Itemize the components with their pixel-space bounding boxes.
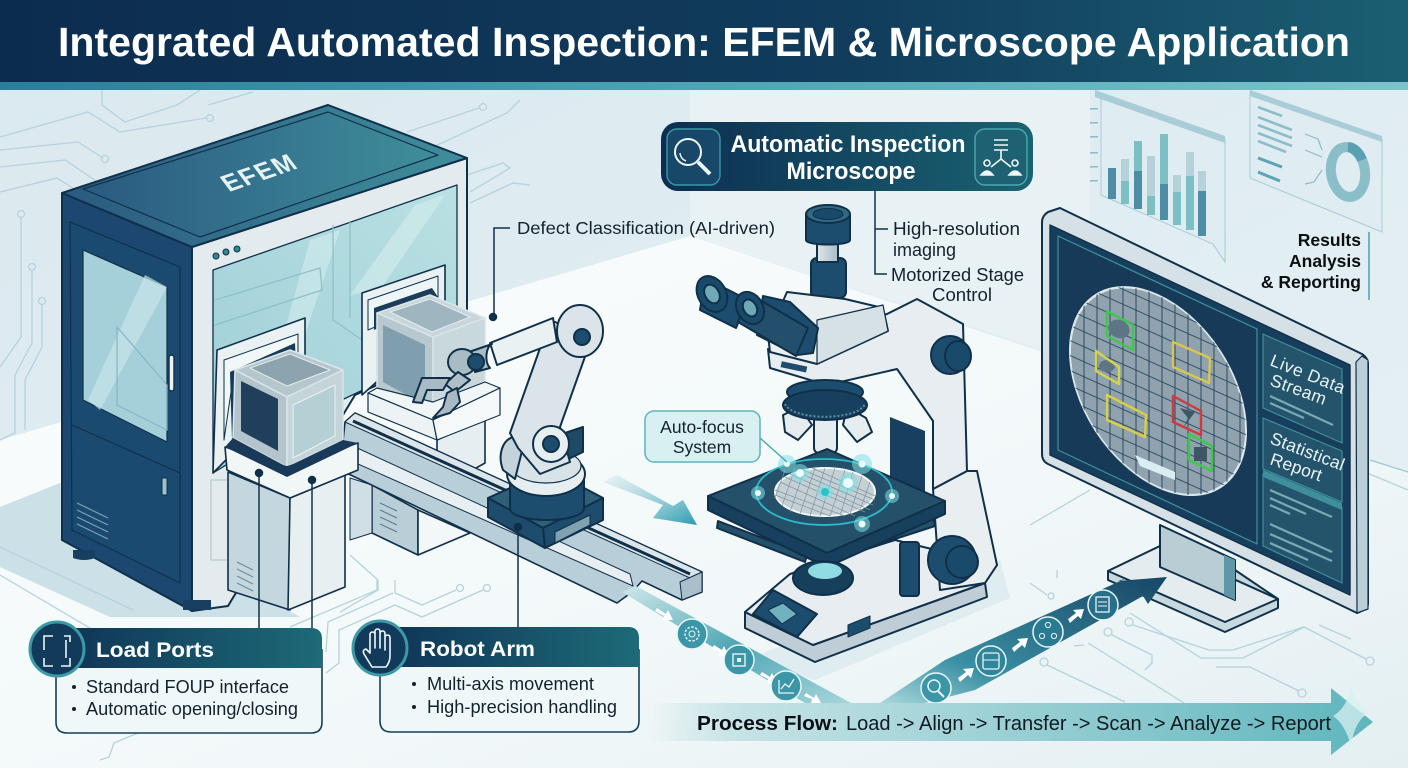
title banner [0, 0, 1408, 90]
panel: load ports [30, 622, 322, 733]
front load port with FOUP [213, 318, 358, 610]
auto-focus callout: System [673, 437, 731, 457]
label: high-resolution imaging: imaging [893, 240, 956, 260]
auto-focus callout: Auto-focus [660, 417, 744, 437]
eyepieces [690, 271, 818, 356]
callout title: Microscope [786, 158, 916, 185]
results analysis label: Analysis [1289, 251, 1361, 271]
label: motorized stage control [891, 265, 1024, 305]
panel: report lines [1263, 470, 1342, 583]
results analysis label: Results [1298, 230, 1361, 250]
microscope callout header [661, 122, 1033, 191]
microscope head [768, 292, 888, 372]
flow arrow: toward microscope [603, 475, 697, 525]
control panel [753, 590, 870, 637]
monitor stand [1108, 525, 1278, 632]
panel: statistical report [1263, 418, 1348, 502]
load ports bullets: Automatic opening/closing [86, 699, 298, 719]
EFEM cabinet [62, 105, 467, 611]
auto-focus callout [645, 411, 787, 462]
background panel: bar chart [1090, 90, 1225, 262]
load ports bullets [72, 677, 298, 719]
icon: hand [353, 621, 407, 675]
callout title: Automatic Inspection [730, 131, 966, 158]
objectives [783, 380, 872, 453]
panel: statistical report: Statistical [1268, 428, 1348, 475]
icon: magnifier [667, 129, 720, 185]
background panel: report with donut [1250, 90, 1382, 232]
robot arm [413, 305, 603, 548]
icon: report step [1088, 590, 1118, 620]
icon: magnifier step [921, 673, 951, 703]
robot arm bullets: High-precision handling [427, 697, 617, 717]
icon: network step [1033, 617, 1063, 647]
label: high-resolution imaging: High-resolution [893, 219, 1020, 239]
flow path: ascending steps [880, 577, 1167, 703]
robot arm bullets: Multi-axis movement [427, 674, 594, 694]
process flow text: Load -> Align -> Transfer -> Scan -> Analyze -> Report [846, 713, 1331, 735]
microscope arm [768, 299, 967, 496]
icon: load port frame [30, 622, 84, 676]
icon: network [975, 129, 1027, 185]
callout title [730, 131, 966, 185]
label: high-resolution imaging [893, 219, 1020, 260]
leader line: defect classification [490, 228, 510, 320]
wafer defect map [1069, 286, 1247, 496]
flow path: descending steps [622, 586, 851, 703]
load ports bullets: Standard FOUP interface [86, 677, 289, 697]
robot arm bullets [412, 674, 617, 717]
panel: live data stream: Stream [1268, 370, 1330, 409]
panel: live data stream [1263, 334, 1349, 443]
panel: robot arm: Robot Arm [420, 638, 535, 661]
panel: load ports: Load Ports [96, 639, 214, 662]
results analysis label: & Reporting [1261, 272, 1361, 292]
icon: chip step [724, 645, 754, 675]
leader line: robot arm [514, 524, 522, 627]
label: defect classification: Defect Classification (AI-driven) [517, 218, 775, 238]
stage [708, 449, 945, 567]
linear rail [340, 413, 702, 603]
icon: settings step [976, 646, 1006, 676]
focus knobs [858, 328, 978, 596]
back load port with FOUP [362, 265, 500, 490]
condenser [793, 561, 853, 595]
wafer with auto-focus markers [751, 454, 899, 532]
panel: statistical report: Report [1268, 449, 1325, 485]
microscope base and column [745, 471, 997, 662]
process flow text: Process Flow: [697, 713, 838, 735]
results analysis label [1261, 230, 1369, 300]
leader lines: microscope features [875, 191, 888, 274]
microscope camera tube [806, 205, 850, 298]
process flow bar [650, 686, 1373, 755]
label: motorized stage control: Control [932, 285, 992, 305]
EFEM label: EFEM [215, 149, 304, 197]
leader lines: load ports [256, 470, 316, 628]
carriage [488, 470, 603, 548]
microscope [690, 205, 997, 662]
icon: gear step [677, 619, 707, 649]
panel: live data stream: Live Data [1268, 350, 1349, 398]
monitor [1042, 208, 1368, 632]
label: motorized stage control: Motorized Stage [891, 265, 1024, 285]
defect markers [1096, 311, 1212, 471]
panel: robot arm [353, 621, 639, 732]
icon: chart step [771, 671, 801, 701]
title banner: Integrated Automated Inspection: EFEM & Microscope Application [58, 19, 1350, 65]
